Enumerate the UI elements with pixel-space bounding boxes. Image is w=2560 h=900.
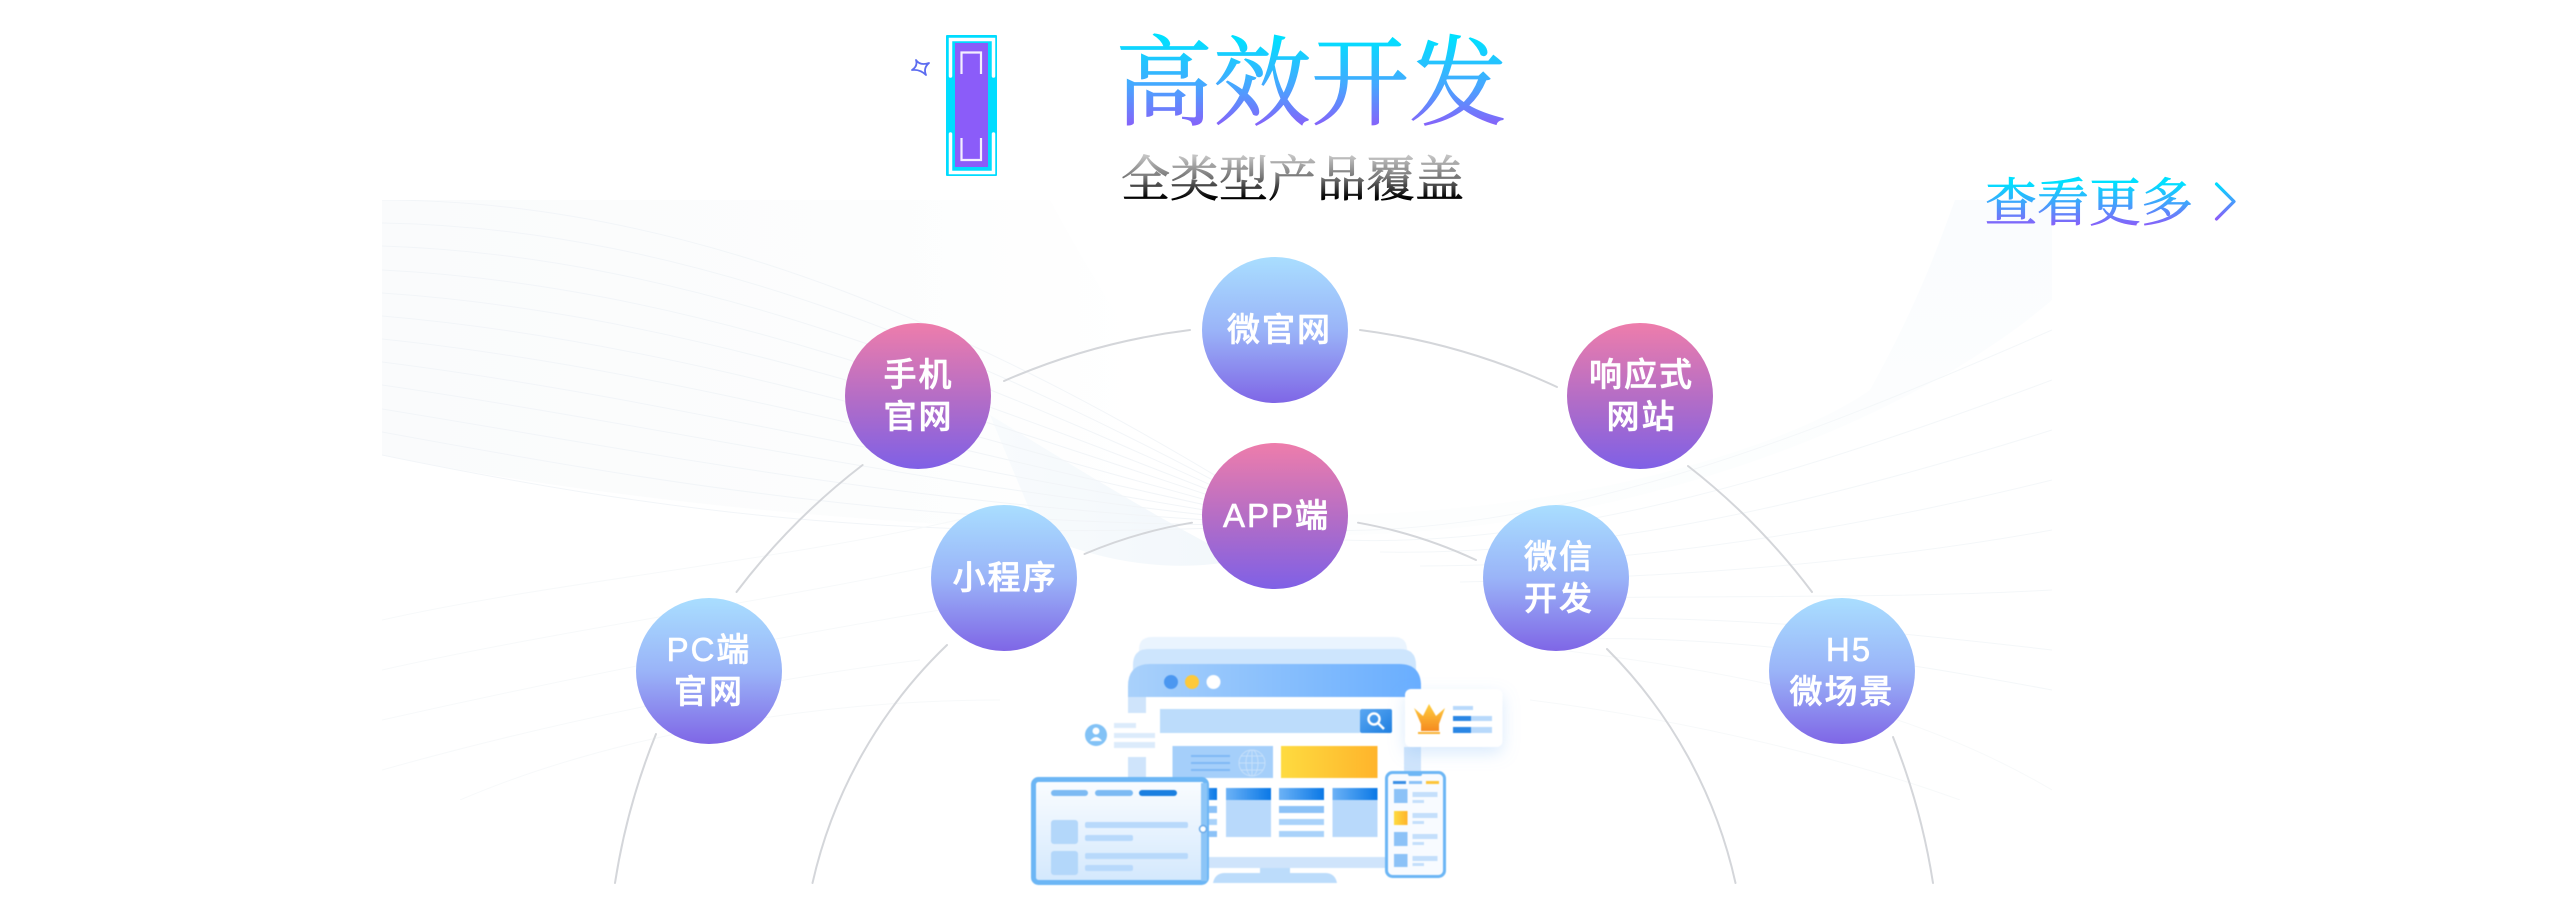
phone: [1386, 772, 1444, 876]
node: 微官网: [1202, 257, 1348, 403]
node: PC端官网: PC端: [667, 631, 751, 668]
node: 响应式网站: 响应式: [1589, 356, 1694, 393]
node: 小程序: [931, 505, 1077, 651]
node: 手机官网: 官网: [884, 398, 954, 435]
monitor: [1128, 637, 1421, 883]
node: 响应式网站: [1567, 323, 1713, 469]
badge bar: [946, 35, 997, 176]
node: H5微场景: 微场景: [1790, 673, 1894, 710]
tablet: [1034, 780, 1207, 882]
node: 手机官网: [845, 323, 991, 469]
subtitle: 全类型产品覆盖: [1121, 152, 1464, 207]
icon: chevron arrow: [2214, 182, 2236, 221]
user card: [1085, 718, 1160, 754]
node: 微信开发: [1483, 505, 1629, 651]
node: 手机官网: 手机: [884, 356, 954, 393]
view more link: [1985, 176, 2236, 233]
title: 高效开发: [1115, 31, 1507, 139]
node: APP端: APP端: [1223, 497, 1330, 534]
node: H5微场景: [1769, 598, 1915, 744]
node: 微官网: 微官网: [1227, 311, 1332, 348]
node: PC端官网: [636, 598, 782, 744]
node: H5微场景: H5: [1826, 631, 1872, 668]
link text: 查看更多: [1985, 176, 2193, 233]
content columns: [1190, 788, 1378, 837]
icon: small star: [912, 60, 929, 75]
node: 微信开发: 开发: [1524, 580, 1594, 617]
node: 响应式网站: 网站: [1606, 398, 1676, 435]
node: APP端: [1202, 443, 1348, 589]
node: PC端官网: 官网: [674, 673, 744, 710]
background wave pattern: [382, 200, 2052, 690]
node: 小程序: 小程序: [952, 559, 1058, 596]
crown card: [1405, 689, 1502, 747]
node: 微信开发: 微信: [1524, 538, 1594, 575]
